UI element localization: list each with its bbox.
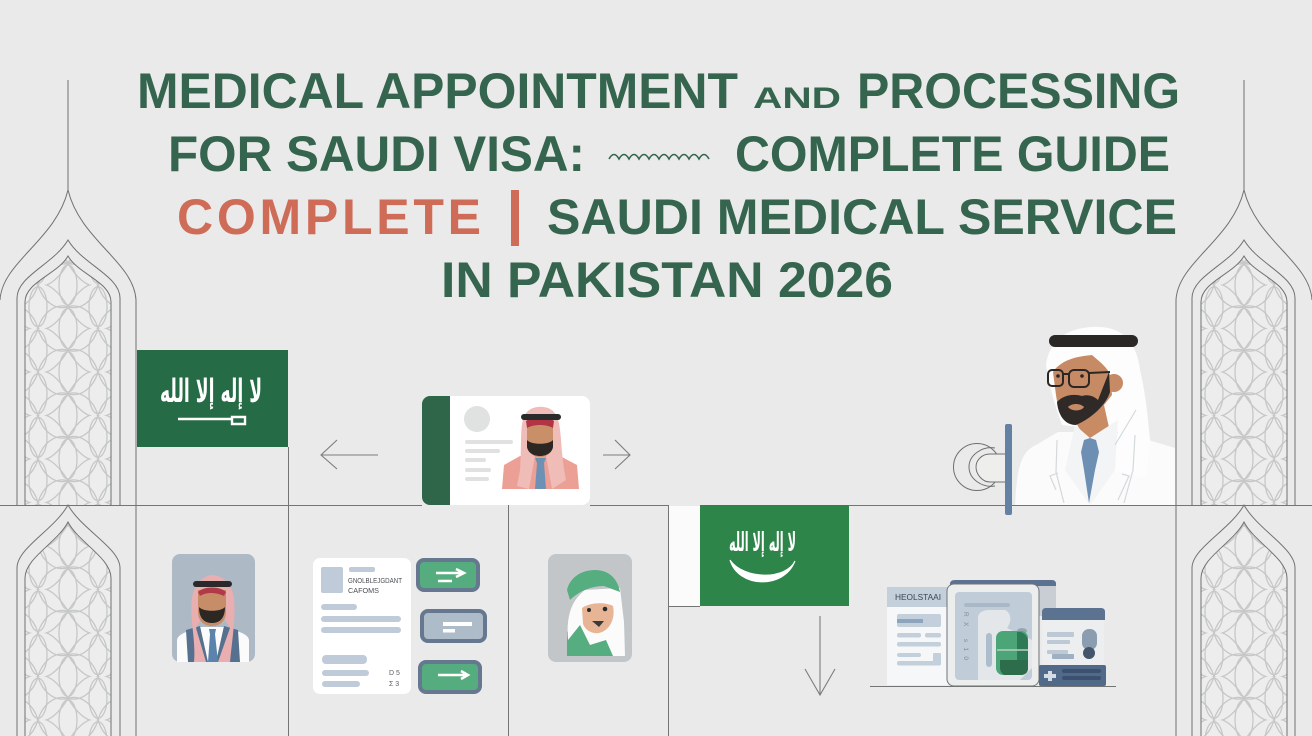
- doctor neck and shirt: [1074, 405, 1110, 445]
- green canister: [996, 631, 1028, 675]
- form heading: GNOLBLEJGDANT: [348, 576, 402, 585]
- flag: Saudi upper: [137, 350, 288, 447]
- flag calligraphy: لا إله إلا الله: [160, 372, 262, 411]
- title: [137, 63, 1180, 308]
- doctor tie: [1081, 438, 1099, 503]
- doctor glasses: [1048, 370, 1110, 387]
- form small values: Σ 3: [389, 681, 399, 688]
- title: SAUDI MEDICAL SERVICE: [547, 189, 1177, 245]
- title: IN PAKISTAN 2026: [441, 252, 893, 308]
- form card: [313, 558, 411, 694]
- form small values: [389, 670, 400, 688]
- portrait: woman in green headscarf: [548, 554, 632, 662]
- button: grey middle: [422, 611, 485, 641]
- button: green lower: [420, 662, 480, 692]
- card photo placeholder: [464, 406, 490, 432]
- arrow: right: [603, 440, 630, 469]
- flag crescent: [730, 560, 795, 582]
- form heading: [348, 576, 402, 595]
- doctor agal: [1049, 335, 1138, 347]
- right minaret arches: [1176, 80, 1312, 736]
- right card: [1039, 608, 1106, 686]
- doctor coat: [1015, 432, 1175, 505]
- ID card: [422, 396, 590, 505]
- form lines: [321, 604, 401, 687]
- card green stripe: [422, 396, 450, 505]
- title: COMPLETE GUIDE: [735, 126, 1170, 182]
- lens device: [954, 444, 1005, 490]
- doctor figure with stand: [954, 327, 1175, 515]
- title: MEDICAL APPOINTMENT: [137, 63, 738, 119]
- arrow: left: [321, 440, 378, 469]
- left document panel: HEOLSTAAI: [895, 593, 941, 602]
- title: AND: [753, 82, 841, 115]
- doctor lapels: [1050, 410, 1136, 503]
- flag: green with white hoist: [669, 505, 849, 606]
- card text lines: [465, 440, 513, 481]
- left minaret arches: [0, 80, 136, 736]
- doctor face: [1053, 355, 1112, 424]
- arrow: down: [805, 616, 835, 695]
- main device: RX s10: [962, 612, 969, 660]
- title: COMPLETE: [177, 189, 481, 245]
- portrait: man in vest: [172, 554, 255, 662]
- back band: [950, 580, 1056, 590]
- doctor ghutra: [1046, 327, 1150, 478]
- form small values: D 5: [389, 670, 400, 677]
- title: FOR SAUDI VISA:: [168, 126, 585, 182]
- form heading: CAFOMS: [348, 586, 379, 595]
- card portrait: [502, 407, 579, 489]
- left document panel: [887, 587, 948, 685]
- button: green upper: [418, 560, 478, 590]
- main device: [947, 584, 1039, 686]
- medical equipment group: [870, 580, 1116, 686]
- form thumbnail: [321, 567, 343, 593]
- flag sword: [178, 417, 245, 424]
- title: PROCESSING: [857, 63, 1180, 119]
- stand post: [1005, 424, 1012, 515]
- equipment base line: [870, 686, 1116, 688]
- doctor beard: [1057, 372, 1110, 425]
- flag: green with white hoist: لا إله إلا الله: [729, 528, 796, 558]
